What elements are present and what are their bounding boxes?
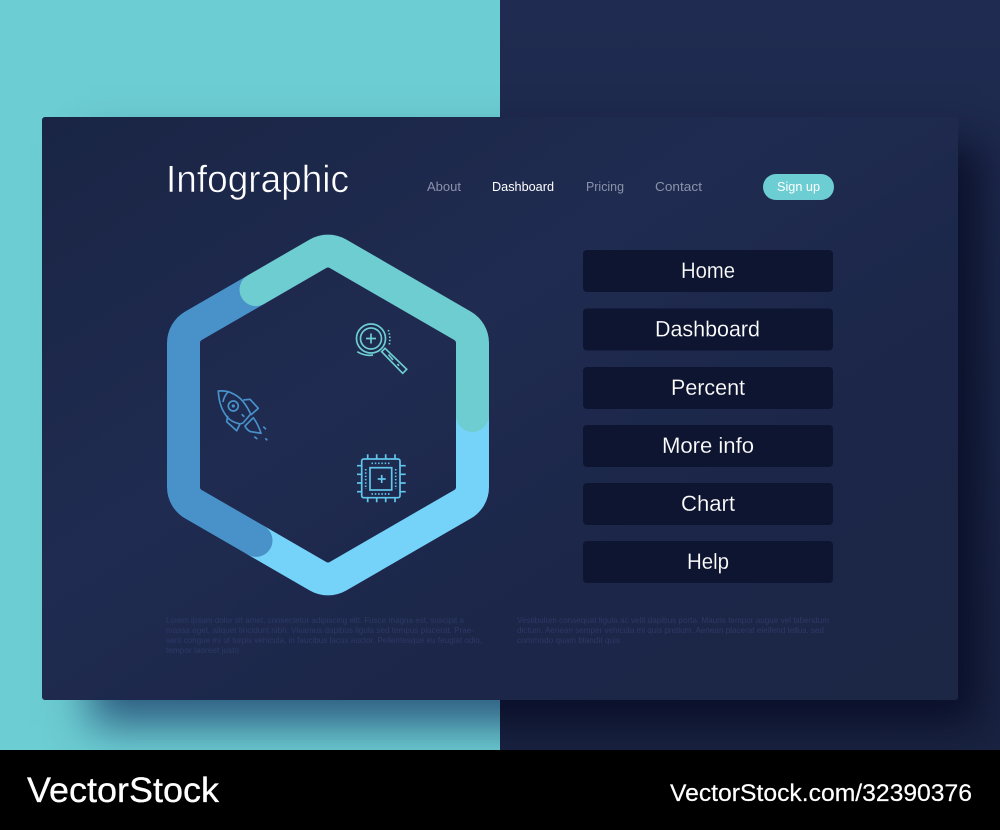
button: Chart: Chart — [681, 491, 735, 516]
sign up button — [763, 174, 834, 200]
button: Percent — [583, 367, 833, 409]
button: Help — [583, 541, 833, 583]
nav: Dashboard: Dashboard — [492, 179, 554, 194]
ring segment: light blue — [256, 415, 472, 579]
main panel — [42, 117, 958, 700]
sign up button: Sign up — [777, 179, 820, 194]
text block: right: Vestibulum consequat ligula ac velit dapibus porta. Mauris tempor augue vel bibendum — [517, 615, 829, 625]
ring segment: blue — [184, 290, 256, 540]
text block: left: Lorem ipsum dolor sit amet, consectetur adipiscing elit. Fusce magna est, suscipit a — [166, 615, 464, 625]
footer url: VectorStock.com/32390376 — [670, 780, 972, 807]
icon: rocket — [218, 391, 267, 440]
text block: left — [166, 615, 482, 655]
button: Home: Home — [681, 258, 735, 283]
button: Help: Help — [687, 549, 729, 574]
button: Dashboard: Dashboard — [655, 316, 760, 342]
text block: right: commodo quam blandit quis — [517, 635, 620, 645]
footer band — [0, 750, 1000, 830]
button: Home — [583, 250, 833, 292]
footer logo text: VectorStock — [27, 771, 220, 810]
icon: magnifier — [356, 324, 407, 373]
hexagon ring chart — [184, 251, 472, 579]
menu buttons — [583, 250, 833, 583]
text block: right: dictum. Aenean semper vehicula mi quis pretium. Aenean placerat eleifend tellus, sed — [517, 625, 824, 635]
button: More info — [583, 425, 833, 467]
text block: left: sent congue mi ut turpis vehicula, in faucibus lacus auctor. Pellentesque eu feugiat odio, — [166, 635, 482, 645]
text block: left: tempor laoreet justo — [166, 645, 239, 655]
ring segment: teal — [256, 251, 472, 416]
navigation — [427, 179, 702, 194]
icon: chip — [357, 454, 406, 502]
button: More info: More info — [662, 433, 754, 458]
button: Percent: Percent — [671, 375, 745, 400]
button: Dashboard — [583, 308, 833, 350]
text block: left: massa eget, aliquet tincidunt nibh. Vivamus dapibus ligula sed tempus placerat. Prae- — [166, 625, 474, 635]
background: navy half with panel shadow — [500, 0, 1000, 750]
button: Chart — [583, 483, 833, 525]
title: Infographic — [166, 159, 349, 201]
nav: Contact: Contact — [655, 179, 702, 194]
nav: About: About — [427, 179, 461, 194]
nav: Pricing: Pricing — [586, 179, 624, 194]
background: teal half with panel shadow — [0, 0, 500, 750]
text block: right — [517, 615, 829, 645]
